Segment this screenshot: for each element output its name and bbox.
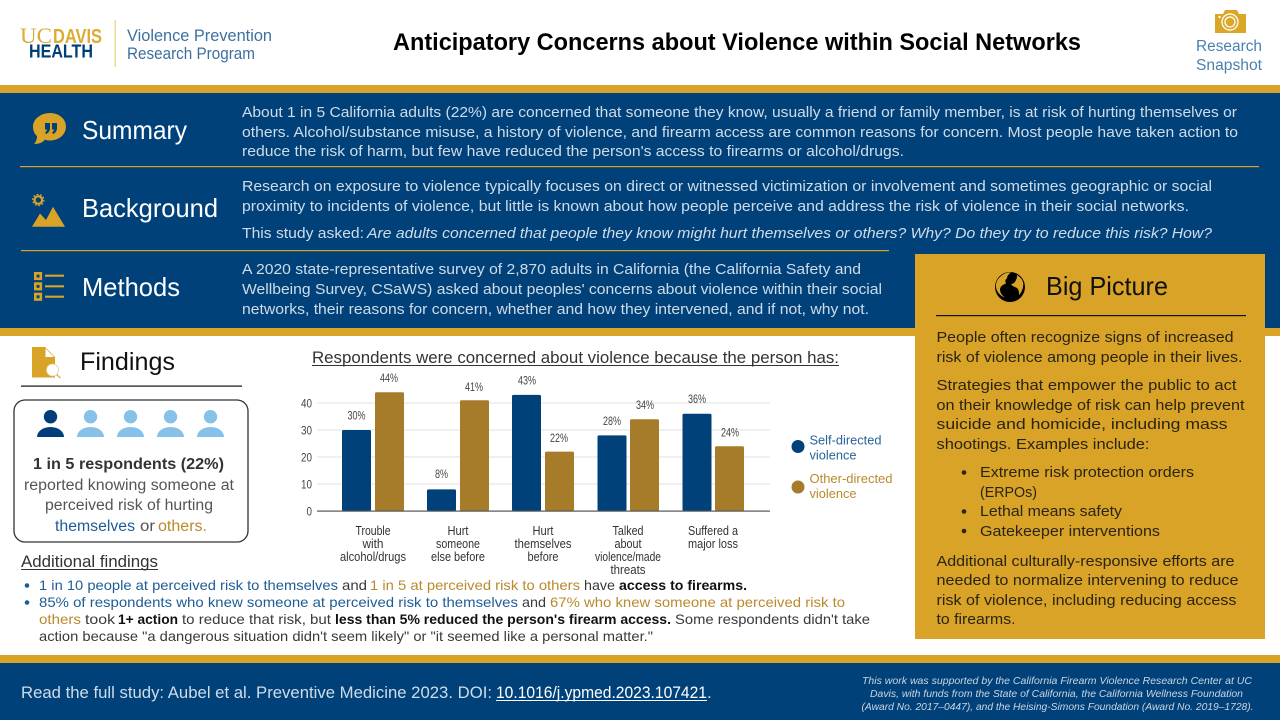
text block: additional findings bullets: 85% of respondents who knew someone at perceived risk to themselves — [39, 595, 518, 610]
title: Anticipatory Concerns about Violence within Social Networks — [393, 29, 1081, 56]
value labels: 8% — [435, 467, 448, 481]
panel: background: Are adults concerned that people they know might hurt themselves or others? Why? Do they try to reduce this risk? How? — [366, 225, 1213, 242]
panel: big picture: to firearms. — [936, 611, 1016, 628]
y axis ticks: 0 — [306, 504, 312, 518]
text block: additional findings bullets: took — [85, 612, 115, 627]
icon: speech bubble — [33, 113, 66, 144]
heading: additional findings: Additional findings — [21, 553, 158, 571]
funding note — [862, 675, 1254, 713]
value labels: 30% — [348, 408, 366, 422]
category labels: Trouble — [356, 524, 391, 538]
text block: additional findings bullets: 1 in 10 people at perceived risk to themselves — [39, 578, 338, 593]
category labels: alcohol/drugs — [340, 550, 406, 564]
logo: UC Davis Health: HEALTH — [29, 42, 93, 62]
funding note: (Award No. 2017–0447), and the Heising-Simons Foundation (Award No. 2019–1728). — [862, 701, 1254, 713]
panel: big picture: (ERPOs) — [980, 484, 1037, 501]
panel: big picture: Lethal means safety — [980, 503, 1122, 520]
icon: camera with Research Snapshot label — [1196, 10, 1263, 74]
citation: 10.1016/j.ypmed.2023.107421 — [496, 683, 707, 702]
legend: Other-directed — [810, 471, 892, 486]
text block: additional findings bullets: 1+ action — [118, 612, 178, 627]
funding note: Davis, with funds from the State of California, the California Wellness Foundation — [870, 688, 1243, 700]
icon: camera with Research Snapshot label: Research — [1196, 38, 1262, 55]
icon: camera with Research Snapshot label: Snapshot — [1196, 57, 1263, 74]
text block: additional findings bullets: Some respondents didn't take — [675, 612, 870, 627]
callout: 1 in 5 respondents: reported knowing someone at — [24, 477, 235, 494]
category labels — [340, 524, 738, 577]
text block: additional findings bullets: to reduce that risk, but — [182, 612, 331, 627]
logo: UC Davis Health — [20, 20, 272, 67]
citation: Read the full study: Aubel et al. Preventive Medicine 2023. DOI: — [21, 683, 492, 702]
logo: UC Davis Health: Research Program — [127, 44, 255, 63]
callout: 1 in 5 respondents: themselves — [55, 518, 135, 535]
value labels: 43% — [518, 374, 536, 388]
text block: additional findings bullets: less than 5% reduced the person's firearm access. — [335, 612, 671, 627]
category labels: Hurt — [532, 524, 554, 538]
text block: additional findings bullets: and — [522, 595, 546, 610]
y axis ticks: 10 — [301, 478, 312, 492]
value labels: 44% — [380, 371, 398, 385]
y axis ticks — [301, 396, 312, 518]
citation: . — [707, 683, 712, 702]
panel: big picture: Big Picture — [1046, 271, 1168, 301]
value labels: 28% — [603, 414, 621, 428]
panel: background: Background — [82, 193, 218, 223]
panel: background: proximity to incidents of violence, but little is known about how people perceive and address the risk of violence in their social networks. — [242, 198, 1189, 215]
legend: violence — [810, 486, 856, 501]
value labels: 41% — [465, 380, 483, 394]
panel: big picture: People often recognize signs of increased — [936, 329, 1234, 346]
icon: sun and mountains — [32, 194, 65, 227]
category labels: before — [528, 550, 559, 564]
y axis ticks: 20 — [301, 450, 312, 464]
panel: big picture: needed to normalize intervening to reduce — [936, 572, 1238, 589]
panel: big picture: Gatekeeper interventions — [980, 523, 1160, 540]
callout: 1 in 5 respondents: perceived risk of hurting — [45, 497, 213, 514]
chart title: Respondents were concerned about violence because the person has: — [312, 348, 839, 367]
footer band — [0, 655, 1280, 720]
y axis ticks: 30 — [301, 424, 312, 438]
icon: five people — [37, 410, 224, 437]
category labels: about — [614, 537, 642, 551]
panel: summary: About 1 in 5 California adults (22%) are concerned that someone they know, usually a friend or family member, is at risk of hurting themselves or — [242, 104, 1237, 121]
category labels: Hurt — [448, 524, 469, 538]
text block: additional findings bullets: 1 in 5 at perceived risk to others — [370, 578, 580, 593]
legend: Self-directed — [810, 432, 882, 448]
logo: UC Davis Health: DAVIS — [53, 26, 102, 48]
panel: big picture: risk of violence among people in their lives. — [936, 349, 1242, 366]
panel: big picture: suicide and homicide, including mass — [936, 416, 1228, 433]
bars: other-directed — [375, 392, 744, 511]
panel: big picture: shootings. Examples include: — [936, 436, 1150, 453]
panel: big picture: Additional culturally-responsive efforts are — [936, 553, 1234, 570]
callout: 1 in 5 respondents: 1 in 5 respondents (22%) — [33, 456, 224, 473]
category labels: with — [362, 537, 384, 551]
legend: violence — [810, 448, 856, 462]
y axis ticks: 40 — [301, 396, 312, 410]
text block: additional findings bullets: action because "a dangerous situation didn't seem likely" or "it seemed like a personal matter." — [39, 629, 653, 644]
panel: big picture: Extreme risk protection orders — [980, 464, 1194, 481]
panel: methods: Wellbeing Survey, CSaWS) asked about peoples' concerns about violence within their social — [242, 281, 882, 298]
bars: self-directed — [342, 395, 712, 511]
category labels: major loss — [688, 537, 738, 551]
value labels: 36% — [688, 392, 706, 406]
legend — [792, 432, 892, 501]
category labels: someone — [436, 537, 480, 551]
text block: additional findings bullets: access to firearms. — [619, 578, 747, 593]
category labels: themselves — [514, 537, 572, 551]
category labels: Talked — [612, 524, 644, 538]
funding note: This work was supported by the California Firearm Violence Research Center at UC — [862, 675, 1252, 687]
panel: background — [32, 178, 1213, 242]
text block: additional findings bullets — [25, 578, 870, 644]
panel: big picture — [915, 254, 1265, 639]
panel: methods: Methods — [82, 272, 180, 302]
text block: additional findings bullets: and — [342, 578, 367, 593]
callout: 1 in 5 respondents — [14, 400, 248, 542]
text block: additional findings bullets: others — [39, 612, 81, 627]
top navy band with gold borders — [0, 85, 1280, 336]
panel: methods — [35, 261, 882, 318]
bar chart — [301, 371, 770, 577]
panel: summary: others. Alcohol/substance misuse, a history of violence, and firearm access are common reasons for concern. Most people have taken action to — [242, 124, 1238, 141]
panel: methods: networks, their reasons for concern, whether and how they intervened, and if not, why not. — [242, 301, 869, 318]
panel: background: This study asked: — [242, 225, 364, 242]
value labels: 34% — [636, 398, 654, 412]
icon: globe — [995, 272, 1025, 302]
panel: summary: Summary — [82, 115, 187, 145]
value labels: 24% — [721, 426, 739, 440]
category labels: Suffered a — [688, 524, 738, 538]
category labels: else before — [431, 550, 485, 564]
citation — [21, 683, 712, 702]
panel: background: Research on exposure to violence typically focuses on direct or witnessed victimization or involvement and sometimes geographic or social — [242, 178, 1212, 195]
category labels: violence/made — [595, 550, 661, 564]
panel: big picture: Strategies that empower the public to act — [936, 377, 1237, 394]
panel: big picture: on their knowledge of risk can help prevent — [936, 397, 1245, 414]
panel: big picture: risk of violence, including reducing access — [936, 592, 1237, 609]
icon: checklist — [35, 273, 64, 300]
category labels: threats — [610, 563, 646, 577]
icon: document with magnifier — [32, 347, 60, 378]
value labels: 22% — [550, 431, 568, 445]
panel: summary: reduce the risk of harm, but few have reduced the person's access to firearms or alcohol/drugs. — [242, 143, 904, 160]
callout: 1 in 5 respondents: or — [140, 518, 155, 535]
logo: UC Davis Health: UC — [20, 23, 52, 48]
panel: findings heading — [21, 347, 242, 387]
value labels — [348, 371, 739, 481]
text block: additional findings bullets: have — [584, 578, 615, 593]
panel: methods: A 2020 state-representative survey of 2,870 adults in California (the California Safety and — [242, 261, 861, 278]
panel: findings heading: Findings — [80, 348, 175, 376]
text block: additional findings bullets: 67% who knew someone at perceived risk to — [550, 595, 845, 610]
logo: UC Davis Health: Violence Prevention — [127, 26, 272, 45]
panel: summary — [33, 104, 1238, 160]
callout: 1 in 5 respondents: others. — [158, 518, 207, 535]
